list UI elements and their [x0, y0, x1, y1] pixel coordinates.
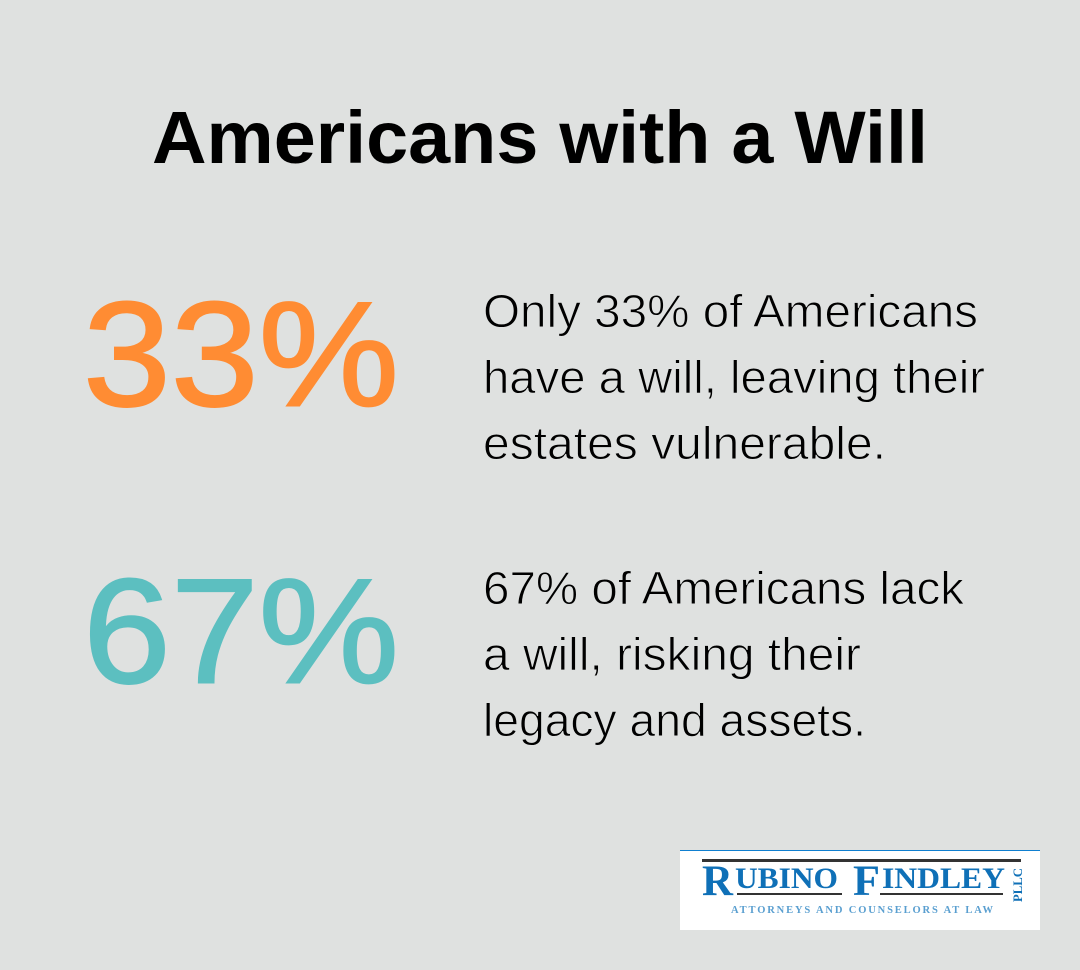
description: 33%: estates vulnerable. — [483, 417, 886, 469]
stat: 33%: 33% — [83, 270, 399, 438]
logo: Rubino Findley PLLC: INDLEY — [882, 862, 1005, 895]
logo: Rubino Findley PLLC: UBINO — [735, 862, 838, 895]
description: 67%: a will, risking their — [483, 628, 861, 680]
description: 67%: legacy and assets. — [483, 694, 866, 746]
description: 67%: 67% of Americans lack — [483, 562, 965, 614]
logo: Rubino Findley PLLC: R — [702, 858, 734, 905]
logo: Rubino Findley PLLC — [680, 850, 1040, 930]
description: 33% — [483, 285, 985, 469]
description: 67% — [483, 562, 965, 746]
description: 33%: have a will, leaving their — [483, 351, 985, 403]
title: Americans with a Will — [152, 96, 928, 179]
description: 33%: Only 33% of Americans — [483, 285, 978, 337]
logo: Rubino Findley PLLC: F — [853, 858, 880, 905]
stat: 67%: 67% — [83, 548, 399, 714]
logo: Rubino Findley PLLC: ATTORNEYS AND COUNSELORS AT LAW — [731, 905, 994, 916]
logo: Rubino Findley PLLC: PLLC — [1010, 868, 1025, 902]
